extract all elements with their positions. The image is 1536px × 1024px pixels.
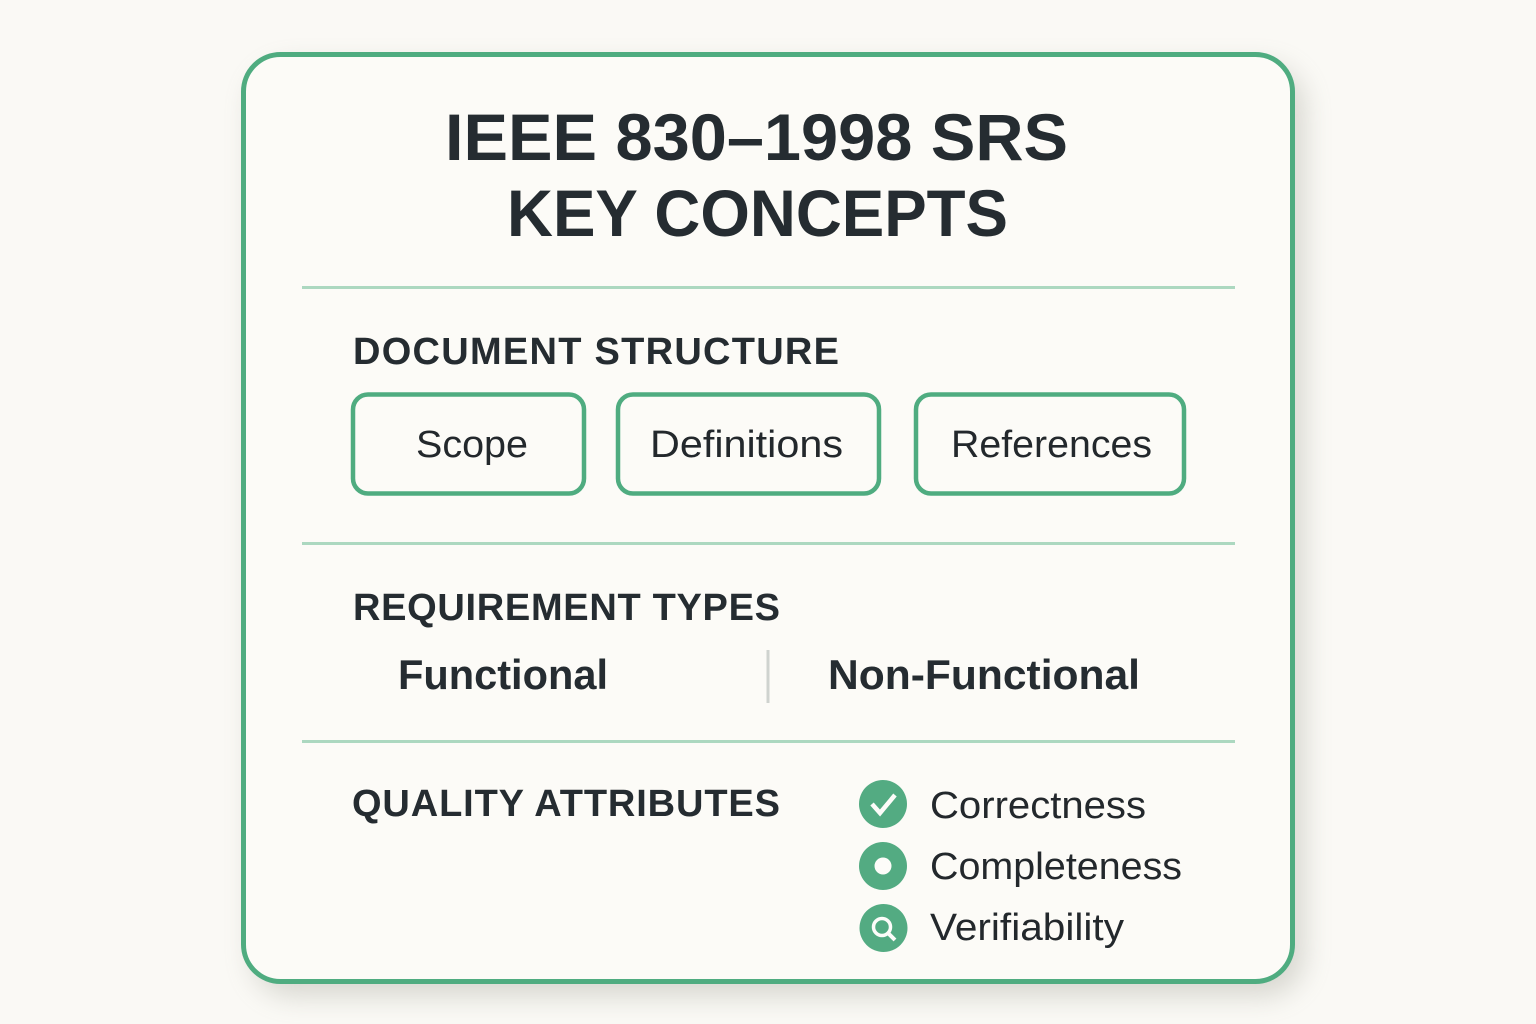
title	[445, 100, 1068, 250]
heading: requirement types: REQUIREMENT TYPES	[353, 587, 780, 629]
box: definitions: Definitions	[650, 424, 843, 466]
label: non-functional: Non-Functional	[828, 651, 1140, 698]
heading: quality attributes: QUALITY ATTRIBUTES	[352, 783, 780, 825]
box: definitions	[618, 394, 879, 494]
panel: quality attributes	[352, 780, 1182, 952]
box: scope	[353, 394, 584, 494]
label: functional: Functional	[398, 651, 608, 698]
icon: check	[859, 780, 907, 828]
attribute: completeness: Completeness	[930, 846, 1182, 888]
title: KEY CONCEPTS	[507, 176, 1008, 250]
panel: requirement types	[353, 587, 1140, 703]
attribute: correctness: Correctness	[930, 785, 1146, 827]
icon: magnifier	[860, 904, 908, 952]
panel: main card	[244, 54, 1292, 982]
card shadow	[252, 66, 1304, 996]
attribute: verifiability: Verifiability	[930, 907, 1124, 949]
title: IEEE 830–1998 SRS	[445, 100, 1068, 174]
box: references: References	[951, 424, 1152, 466]
box: references	[916, 394, 1184, 494]
icon: dot	[859, 842, 907, 890]
heading: document structure: DOCUMENT STRUCTURE	[353, 331, 839, 373]
panel: document structure	[353, 331, 1184, 494]
box: scope: Scope	[416, 424, 528, 466]
